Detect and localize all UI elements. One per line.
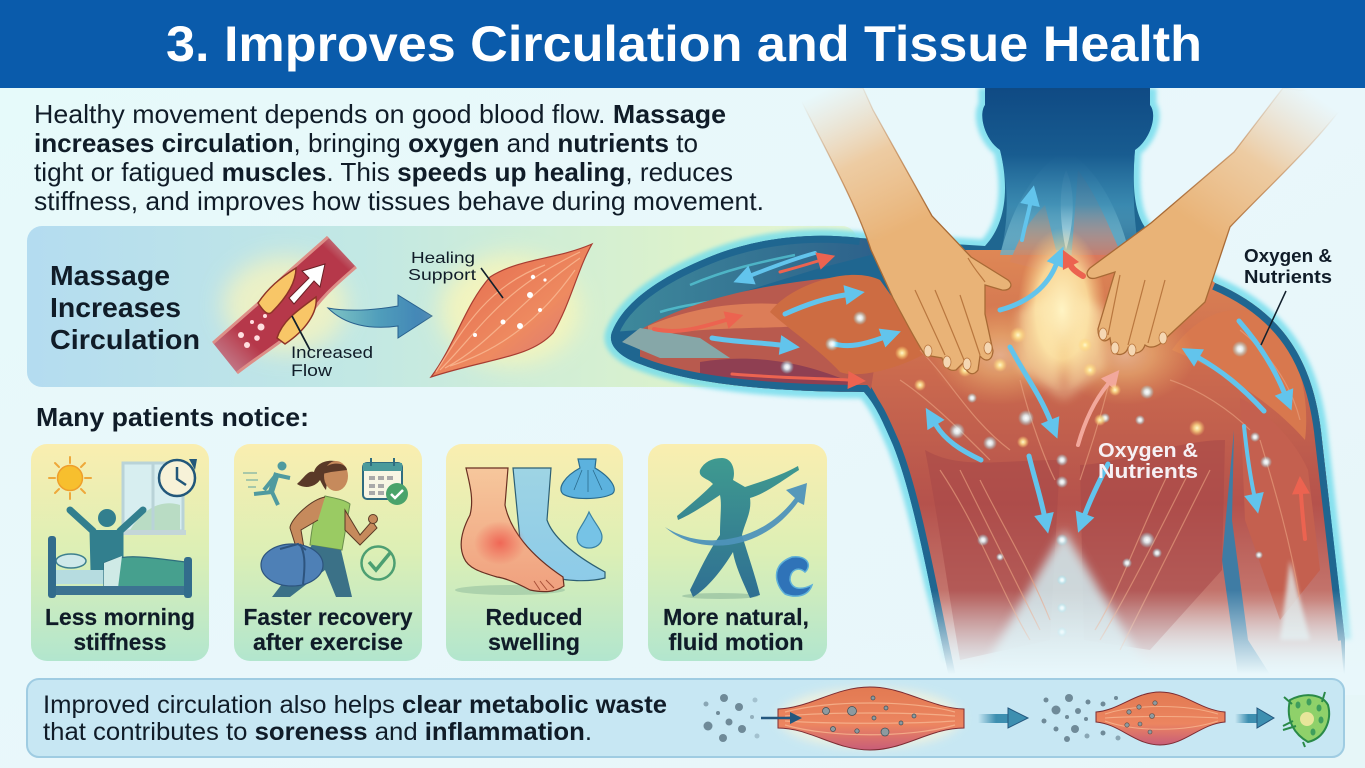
icon: dancer xyxy=(677,458,799,599)
label: after exercise xyxy=(253,629,403,655)
card: reduced swelling xyxy=(446,444,623,661)
head xyxy=(982,88,1153,255)
arrow: vessel to muscle xyxy=(328,295,432,338)
icon: clock xyxy=(159,459,197,496)
label: oxygen and nutrients, shoulder: Oxygen & xyxy=(1244,246,1332,266)
bottom fade of body xyxy=(860,590,1365,695)
heading: massage increases circulation: Increases xyxy=(50,292,181,323)
icon: large muscle xyxy=(778,687,964,750)
icon: water drop xyxy=(577,512,602,548)
heading: many patients notice: Many patients notice: xyxy=(36,402,309,432)
panel: metabolic waste xyxy=(27,679,1344,757)
icon: small runner xyxy=(243,462,290,505)
body glow outline xyxy=(611,88,1345,660)
arrow: waste out xyxy=(978,708,1028,728)
label: oxygen and nutrients, shoulder: Nutrients xyxy=(1244,267,1332,287)
intro paragraph: stiffness, and improves how tissues behave during movement. xyxy=(34,186,764,216)
latissimus and spine xyxy=(925,450,1060,660)
label: increased flow: Increased xyxy=(291,343,373,362)
heading: massage increases circulation: Circulation xyxy=(50,324,200,355)
label xyxy=(45,604,195,655)
card: less morning stiffness xyxy=(31,444,209,661)
icon: swoosh arrow xyxy=(665,483,807,546)
label: stiffness xyxy=(74,629,166,655)
intro paragraph: tight or fatigued muscles. This speeds up healing, reduces xyxy=(34,157,733,187)
icon: blue foot xyxy=(513,468,605,581)
label xyxy=(486,604,582,655)
label: swelling xyxy=(488,629,580,655)
label: Faster recovery xyxy=(244,604,413,630)
label xyxy=(663,604,809,655)
card: faster recovery after exercise xyxy=(234,444,422,661)
glowing oxygen particles xyxy=(780,311,1272,637)
text: metabolic waste: that contributes to soreness and inflammation. xyxy=(43,718,592,746)
illustration: back with massaging hands xyxy=(600,88,1365,700)
arrow: to kidney xyxy=(1235,708,1274,728)
icon: waste particles xyxy=(704,694,760,742)
icon: green filter cell xyxy=(1283,692,1329,747)
label: increased flow: Flow xyxy=(291,361,333,380)
arm muscle xyxy=(640,278,880,395)
label: Reduced xyxy=(486,604,582,630)
intro paragraph: Healthy movement depends on good blood flow. Massage xyxy=(34,99,726,129)
arm band xyxy=(620,238,872,332)
arrow: into muscle xyxy=(761,712,802,724)
icon: small muscle xyxy=(1096,692,1225,745)
intro paragraph xyxy=(34,99,764,216)
label: Less morning xyxy=(45,604,195,630)
panel: massage increases circulation xyxy=(27,226,857,387)
right shoulder xyxy=(1173,341,1306,440)
heading: massage increases circulation xyxy=(50,260,200,355)
label: oxygen and nutrients, centre: Nutrients xyxy=(1098,461,1198,483)
label: fluid motion xyxy=(668,629,804,655)
arrows: circulation flow xyxy=(654,205,1305,539)
neck muscles xyxy=(1000,200,1126,255)
text: metabolic waste xyxy=(43,691,667,746)
body muscle layers xyxy=(600,88,1360,700)
hand: left xyxy=(795,88,1011,374)
label: healing support: Healing xyxy=(411,250,475,267)
label: healing support xyxy=(408,250,477,284)
icon: blood vessel with plaque xyxy=(213,237,356,373)
icon: wave xyxy=(776,557,812,596)
label xyxy=(244,604,413,655)
icon: calendar with check xyxy=(363,458,408,505)
icon: healing muscle xyxy=(431,244,592,377)
icon: sun xyxy=(49,457,91,499)
text: metabolic waste: Improved circulation also helps clear metabolic waste xyxy=(43,691,667,719)
icon: swollen red foot xyxy=(455,468,565,595)
header bar xyxy=(0,0,1365,88)
label: oxygen and nutrients, shoulder xyxy=(1244,246,1332,345)
fibres xyxy=(900,330,1300,650)
label: oxygen and nutrients, centre xyxy=(1098,440,1198,483)
card: more natural, fluid motion xyxy=(648,444,827,661)
label: healing support: Support xyxy=(408,267,477,284)
upper back cream glow xyxy=(1018,228,1106,392)
inner dark rim xyxy=(611,236,1345,682)
hand: right xyxy=(1087,88,1350,356)
icon: dispersing particles xyxy=(1042,694,1120,742)
label: oxygen and nutrients, centre: Oxygen & xyxy=(1098,440,1198,462)
heading: massage increases circulation: Massage xyxy=(50,260,170,291)
icon: ice bag xyxy=(561,459,614,498)
intro paragraph: increases circulation, bringing oxygen and nutrients to xyxy=(34,128,698,158)
deltoid xyxy=(770,275,930,374)
icon: check circle xyxy=(362,546,394,580)
label: increased flow xyxy=(291,343,373,380)
icon: woman carrying gym bag xyxy=(261,461,378,597)
icon: window xyxy=(120,463,186,535)
title: 3. Improves Circulation and Tissue Health xyxy=(166,16,1202,72)
label: More natural, xyxy=(663,604,809,630)
icon: person waking in bed xyxy=(48,509,192,598)
